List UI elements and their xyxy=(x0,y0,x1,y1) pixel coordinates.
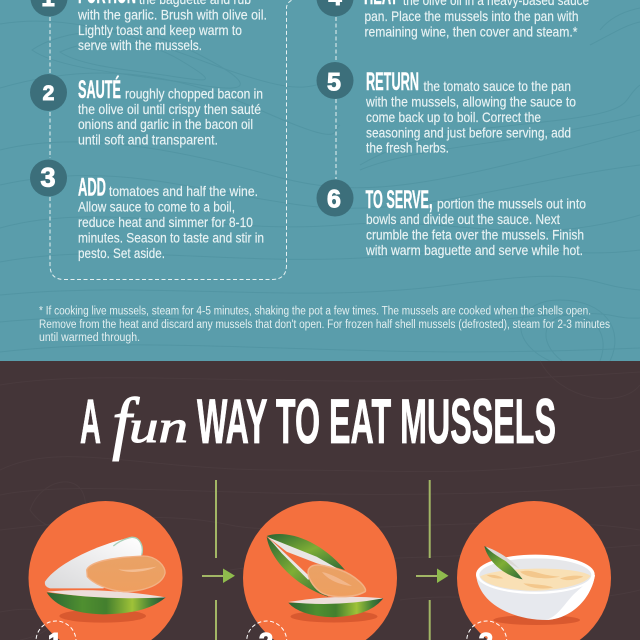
step 6 text: crumble the feta over the mussels. Finish xyxy=(366,226,584,242)
step 2 badge xyxy=(30,74,67,111)
step 3 text: tomatoes and half the wine. xyxy=(109,183,258,199)
step 5 text: with the mussels, allowing the sauce to xyxy=(365,94,576,110)
title: A xyxy=(80,387,101,457)
icon: mussel with shell as tongs xyxy=(267,534,383,622)
step 6 text: portion the mussels out into xyxy=(437,196,586,212)
step 1 xyxy=(30,0,267,53)
step 6 badge xyxy=(316,180,354,216)
orange circle 3 xyxy=(457,501,611,640)
panel: step 1 open mussel xyxy=(28,501,182,640)
step 2 xyxy=(30,74,263,148)
footnote: until warmed through. xyxy=(39,332,140,344)
icon: bowl of sauce with shell scoop xyxy=(476,546,595,625)
step 2 text: SAUTÉ xyxy=(78,75,121,104)
step 3 text xyxy=(78,174,264,261)
step 2 text: onions and garlic in the bacon oil xyxy=(78,116,253,132)
step 2 text: roughly chopped bacon in xyxy=(125,86,263,102)
step 5 badge xyxy=(316,62,354,99)
step 3 badge: 3 xyxy=(40,162,56,192)
step badge 3 xyxy=(467,621,507,640)
step 6 text: TO SERVE, xyxy=(366,186,432,214)
step 1 text: with the garlic. Brush with olive oil. xyxy=(77,6,267,22)
arrow 2 xyxy=(416,568,448,583)
step 1 text: serve with the mussels. xyxy=(78,37,202,53)
arrow 1 xyxy=(202,568,235,583)
step 3 xyxy=(30,160,264,261)
step 4 badge xyxy=(316,0,354,16)
step 6 xyxy=(316,180,586,258)
icon: mussel on half shell xyxy=(45,537,166,623)
step 6 text: bowls and divide out the sauce. Next xyxy=(366,211,560,227)
panel: step 3 scooping sauce xyxy=(457,501,611,640)
step 5 text: come back up to boil. Correct the xyxy=(366,109,541,125)
step 3 text: pesto. Set aside. xyxy=(78,245,165,261)
step 1 text xyxy=(77,0,267,53)
step 4 text: pan. Place the mussels into the pan with xyxy=(364,8,578,24)
step 6 text: with warm baguette and serve while hot. xyxy=(365,242,583,258)
step 3 text: ADD xyxy=(78,174,106,202)
step 4 xyxy=(316,0,589,40)
panel: step 2 mussel shell pincers xyxy=(243,501,397,640)
teal recipe background xyxy=(0,0,640,361)
title: un xyxy=(129,401,188,452)
step 6 text xyxy=(365,186,586,258)
title: f xyxy=(112,385,140,462)
step 4 text: remaining wine, then cover and steam.* xyxy=(364,24,578,40)
orange circle 1 xyxy=(28,501,182,640)
dark section background xyxy=(0,361,640,640)
step 2 text xyxy=(78,75,263,148)
step 5 badge: 5 xyxy=(327,68,341,96)
step 5 xyxy=(316,62,576,156)
step 1 text: Lightly toast and keep warm to xyxy=(78,22,242,38)
step 6 badge: 6 xyxy=(327,186,341,214)
step 4 text xyxy=(364,0,589,40)
vertical divider lines xyxy=(216,480,430,640)
dashed step connector: left column xyxy=(50,0,292,280)
step 2 badge: 2 xyxy=(43,82,54,105)
step 3 text: reduce heat and simmer for 8-10 xyxy=(78,214,253,230)
step 3 badge xyxy=(30,160,67,196)
step 3 text: minutes. Season to taste and stir in xyxy=(78,230,264,246)
step badge 1 xyxy=(36,621,76,640)
step 5 text: seasoning and just before serving, add xyxy=(366,124,571,140)
footnote xyxy=(39,306,610,344)
title xyxy=(80,385,556,462)
step 5 text: the fresh herbs. xyxy=(366,140,449,156)
step 3 text: Allow sauce to come to a boil, xyxy=(78,198,235,214)
step 5 text: RETURN xyxy=(366,68,419,96)
step 2 text: until soft and transparent. xyxy=(78,132,218,148)
step badge 2 xyxy=(247,621,287,640)
step 1 badge xyxy=(30,0,68,16)
step 2 text: the olive oil until crispy then sauté xyxy=(78,101,261,117)
orange circle 2 xyxy=(243,501,397,640)
dashed step connector: right column xyxy=(335,17,337,179)
step 5 text: the tomato sauce to the pan xyxy=(424,78,571,94)
step 5 text xyxy=(365,68,576,156)
